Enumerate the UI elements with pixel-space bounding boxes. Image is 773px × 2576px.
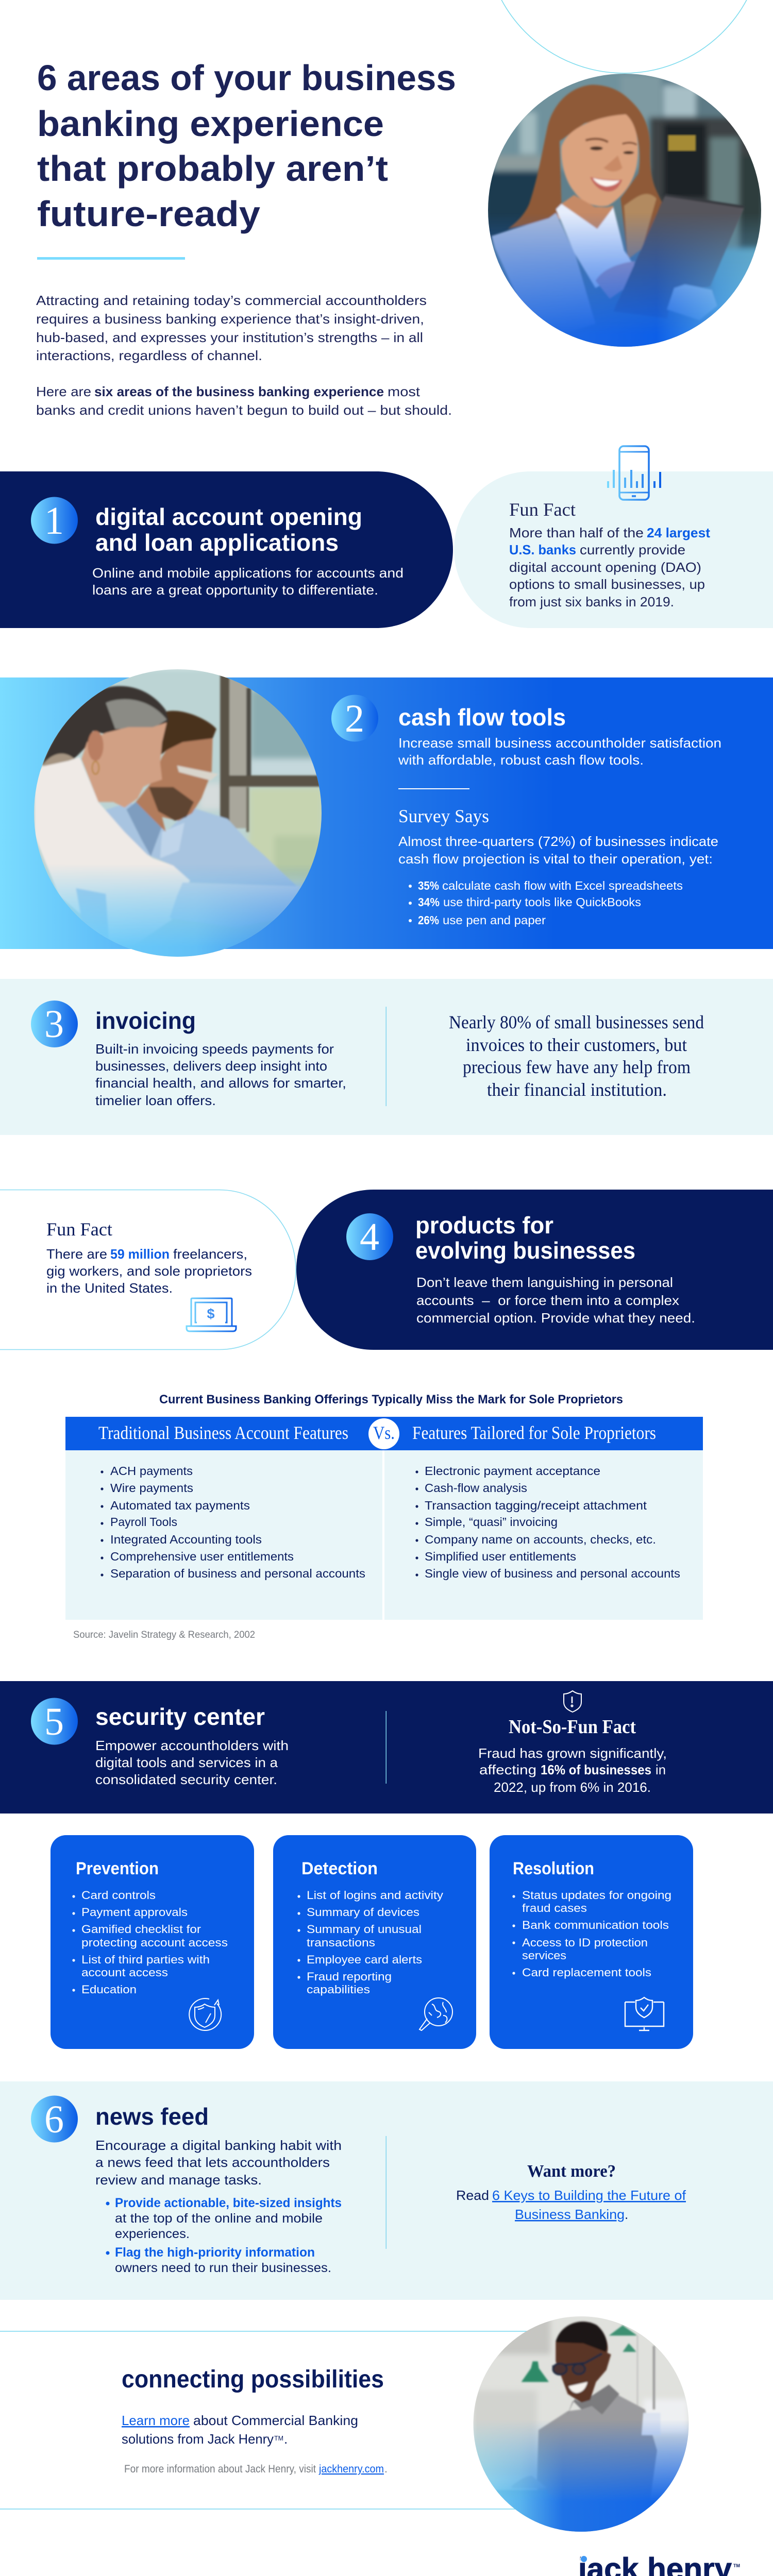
title [37,58,456,234]
body 4 [416,1275,695,1326]
card list: fraud cases [522,1902,587,1914]
panel: section 1 digital account opening [0,471,453,628]
fun fact text: There are [46,1246,107,1262]
panel: fun fact 1 [454,446,773,628]
fun fact text: from just six banks in 2019. [509,594,674,609]
card list: List of logins and activity [307,1889,443,1902]
body 3 [95,1041,346,1108]
quote: 80% of small businesses: Nearly 80% of small businesses send [449,1012,704,1032]
card list [72,1889,228,1996]
not-so-fun-fact text: 2022, up from 6% in 2016. [494,1780,651,1795]
closing heading: connecting possibilities [122,2366,384,2393]
number badge 1 [31,497,78,544]
body 4: commercial option. Provide what they need. [416,1310,695,1326]
card list: Status updates for ongoing [522,1889,671,1902]
card list: transactions [307,1936,375,1949]
body 3: financial health, and allows for smarter, [95,1075,346,1091]
body 6: Encourage a digital banking habit with [95,2138,342,2153]
number badge 2 [331,694,378,742]
body 3: timelier loan offers. [95,1093,216,1108]
card title: Detection [301,1859,378,1878]
body 5: Empower accountholders with [95,1738,289,1753]
list: traditional features: Separation of business and personal accounts [110,1567,365,1580]
not-so-fun-fact text: Fraud has grown significantly, [478,1745,667,1761]
closing text: about Commercial Banking [193,2413,358,2428]
photo: man with glasses and tablet [473,2316,688,2532]
want more link text: 6 Keys to Building the Future of [492,2188,686,2203]
fun fact text: U.S. banks [509,542,576,557]
intro text: Here are [36,384,91,399]
list: tailored features: Electronic payment acceptance [425,1464,600,1478]
icon: monitor with shield [625,1997,664,2030]
icon: shield with refresh arrow [189,1998,221,2030]
body 6: a news feed that lets accountholders [95,2155,330,2170]
list: traditional features: Comprehensive user entitlements [110,1550,294,1563]
icon: phone with bars [607,446,661,500]
more information line: . [384,2463,388,2475]
body 6: review and manage tasks. [95,2172,262,2188]
news feed bullets: Provide actionable, bite-sized insights [115,2196,342,2210]
fun fact text: digital account opening (DAO) [509,560,701,575]
card list: Access to ID protection [522,1936,648,1949]
number badge 6 [31,2096,78,2142]
want more link text [456,2188,686,2222]
decorative circle outline [485,0,763,73]
icon: warning shield [564,1691,581,1712]
fun fact text: More than half of the [509,525,644,540]
list: tailored features: Single view of business and personal accounts [425,1567,680,1580]
card list: account access [81,1966,168,1979]
intro text: requires a business banking experience that’s insight-driven, [36,311,424,327]
card title: Resolution [513,1859,594,1878]
number badge 4: 4 [360,1215,379,1259]
news feed bullets: experiences. [115,2227,190,2241]
news feed bullets: owners need to run their businesses. [115,2261,331,2275]
panel: section 2 cash flow tools [0,667,773,967]
photo: woman with tablet [488,74,761,347]
panel: section 5 security center [0,1681,773,1814]
list: traditional features: ACH payments [110,1464,193,1478]
icon: laptop with dollar [187,1298,236,1331]
card: resolution [490,1835,693,2049]
quote: 80% of small businesses: invoices to their customers, but [466,1035,687,1055]
list: tailored features: Simple, “quasi” invoicing [425,1515,558,1529]
fun fact text [509,525,710,609]
comparison table heading: Current Business Banking Offerings Typically Miss the Mark for Sole Proprietors [159,1393,623,1406]
not-so-fun-fact text [478,1745,667,1795]
body 5 [95,1738,289,1787]
list: tailored features: Cash-flow analysis [425,1481,527,1495]
intro text [36,293,452,418]
body 5: consolidated security center. [95,1772,277,1787]
panel: section 4 products [296,1190,773,1350]
card list: List of third parties with [81,1953,210,1966]
heading 2: cash flow tools [398,704,566,731]
fun fact heading: Fun Fact [509,499,576,520]
body 3: businesses, delivers deep insight into [95,1058,327,1074]
survey bullets: 35% [418,879,439,892]
list: traditional features: Integrated Accounting tools [110,1533,262,1546]
icon: magnifier with virus [419,1998,452,2030]
body 4: accounts – or force them into a complex [416,1293,679,1308]
body 3: Built-in invoicing speeds payments for [95,1041,334,1057]
survey bullets: 26% [418,913,439,927]
panel: fun fact 2 [0,1190,296,1350]
card list: capabilities [307,1983,370,1996]
fun fact text: in the United States. [46,1280,173,1296]
survey text [398,834,718,867]
number badge 5: 5 [44,1700,64,1743]
fun fact text: 59 million [110,1246,170,1262]
fun fact text: options to small businesses, up [509,577,705,592]
title: future-ready [37,194,260,234]
not-so-fun-fact heading: Not-So-Fun Fact [509,1716,636,1738]
number badge 2: 2 [345,697,364,740]
quote: 80% of small businesses: their financial institution. [487,1079,667,1100]
card list: Card controls [81,1889,156,1902]
list: tailored features [415,1464,680,1580]
news feed bullets: at the top of the online and mobile [115,2211,323,2226]
card: detection [273,1835,476,2049]
intro text: interactions, regardless of channel. [36,348,262,363]
survey says heading: Survey Says [398,806,489,826]
want more link text: Read [456,2188,489,2203]
card list: Summary of devices [307,1906,419,1919]
list: traditional features: Automated tax payments [110,1499,250,1512]
closing band lines [0,2331,531,2509]
heading 1 [95,503,362,556]
card list: Education [81,1983,137,1996]
survey text: cash flow projection is vital to their operation, yet: [398,851,713,867]
want more link text: Business Banking [515,2207,625,2222]
heading 3: invoicing [95,1007,196,1034]
card list: services [522,1949,566,1962]
intro text: six areas of the business banking experience [94,384,384,399]
heading 4: products for [415,1212,553,1239]
list: tailored features: Simplified user entitlements [425,1550,576,1563]
list: tailored features: Transaction tagging/receipt attachment [425,1499,647,1512]
number badge 3 [31,1001,78,1047]
survey bullets: 34% [418,895,440,909]
comparison table [65,1417,703,1620]
fun fact text: 24 largest [647,525,710,540]
want more heading: Want more? [527,2162,616,2181]
title: that probably aren’t [37,148,388,189]
card list [512,1889,671,1979]
fun fact text: gig workers, and sole proprietors [46,1263,252,1279]
table header right: Features Tailored for Sole Proprietors [412,1422,656,1443]
logo: jack henry: TM [733,2563,740,2568]
card list: Summary of unusual [307,1923,422,1936]
panel: section 3 invoicing [0,979,773,1135]
want more link text: . [625,2207,628,2222]
list: traditional features: Payroll Tools [110,1515,177,1529]
closing text: . [284,2431,288,2447]
fun fact text: freelancers, [173,1246,247,1262]
title rule [37,257,185,260]
body 4: Don’t leave them languishing in personal [416,1275,673,1290]
news feed bullets [106,2196,342,2275]
survey bullets: use pen and paper [443,913,546,927]
card list: Gamified checklist for [81,1923,201,1936]
fun fact heading: Fun Fact [46,1219,112,1240]
quote: 80% of small businesses [449,1012,704,1100]
intro text: banks and credit unions haven’t begun to build out – but should. [36,402,452,418]
source note: Source: Javelin Strategy & Research, 2002 [73,1630,255,1640]
heading 1: and loan applications [95,529,339,556]
body 2: with affordable, robust cash flow tools. [398,752,644,768]
heading 4: evolving businesses [415,1237,635,1264]
card list: Bank communication tools [522,1919,669,1931]
list: traditional features [100,1464,365,1580]
news feed bullets: Flag the high-priority information [115,2245,315,2260]
closing text: Learn more [122,2413,190,2428]
photo: two colleagues [31,667,331,967]
not-so-fun-fact text: affecting [479,1762,536,1777]
body 2 [398,735,721,768]
card list: Card replacement tools [522,1966,651,1979]
card list [297,1889,443,1996]
fun fact text [46,1246,252,1296]
survey bullets: calculate cash flow with Excel spreadsheets [442,879,683,892]
card: prevention [51,1835,254,2049]
body 6 [95,2138,342,2188]
closing text: TM [274,2434,283,2442]
intro text: most [388,384,421,399]
intro text: hub-based, and expresses your institution’s strengths – in all [36,330,423,345]
icon: laptop with dollar: $ [207,1306,215,1321]
quote: 80% of small businesses: precious few have any help from [463,1057,691,1077]
number badge 3: 3 [44,1003,64,1046]
heading 6: news feed [95,2103,209,2130]
not-so-fun-fact text: in [656,1762,666,1777]
number badge 4 [346,1213,393,1260]
number badge 5 [31,1698,78,1744]
number badge 6: 6 [44,2098,64,2141]
card list: Employee card alerts [307,1953,422,1966]
more information line: jackhenry.com [318,2463,384,2475]
not-so-fun-fact text: 16% of businesses [541,1762,651,1777]
survey bullets: use third-party tools like QuickBooks [443,895,641,909]
closing text [122,2413,358,2447]
heading 1: digital account opening [95,503,362,530]
fun fact text: currently provide [580,542,685,557]
body 1: loans are a great opportunity to differentiate. [92,582,378,598]
body 1: Online and mobile applications for accounts and [92,565,404,581]
list: tailored features: Company name on accounts, checks, etc. [425,1533,656,1546]
heading 4 [415,1212,635,1264]
survey text: Almost three-quarters (72%) of businesses indicate [398,834,718,849]
card list: Payment approvals [81,1906,188,1919]
body 2: Increase small business accountholder satisfaction [398,735,721,751]
intro text: Attracting and retaining today’s commercial accountholders [36,293,427,308]
vs badge: Vs. [373,1422,395,1443]
card title: Prevention [76,1859,159,1878]
survey bullets [409,879,683,927]
title: banking experience [37,104,384,144]
card list: Fraud reporting [307,1970,392,1983]
more information line: For more information about Jack Henry, visit [124,2463,316,2475]
title: 6 areas of your business [37,58,456,98]
body 1 [92,565,404,598]
card list: protecting account access [81,1936,228,1949]
body 5: digital tools and services in a [95,1755,278,1770]
number badge 1: 1 [44,499,64,543]
list: traditional features: Wire payments [110,1481,193,1495]
vs badge [368,1418,399,1449]
panel: section 6 news feed [0,2081,773,2300]
heading 5: security center [95,1703,265,1730]
table header left: Traditional Business Account Features [98,1422,348,1443]
closing text: solutions from Jack Henry [122,2431,274,2447]
